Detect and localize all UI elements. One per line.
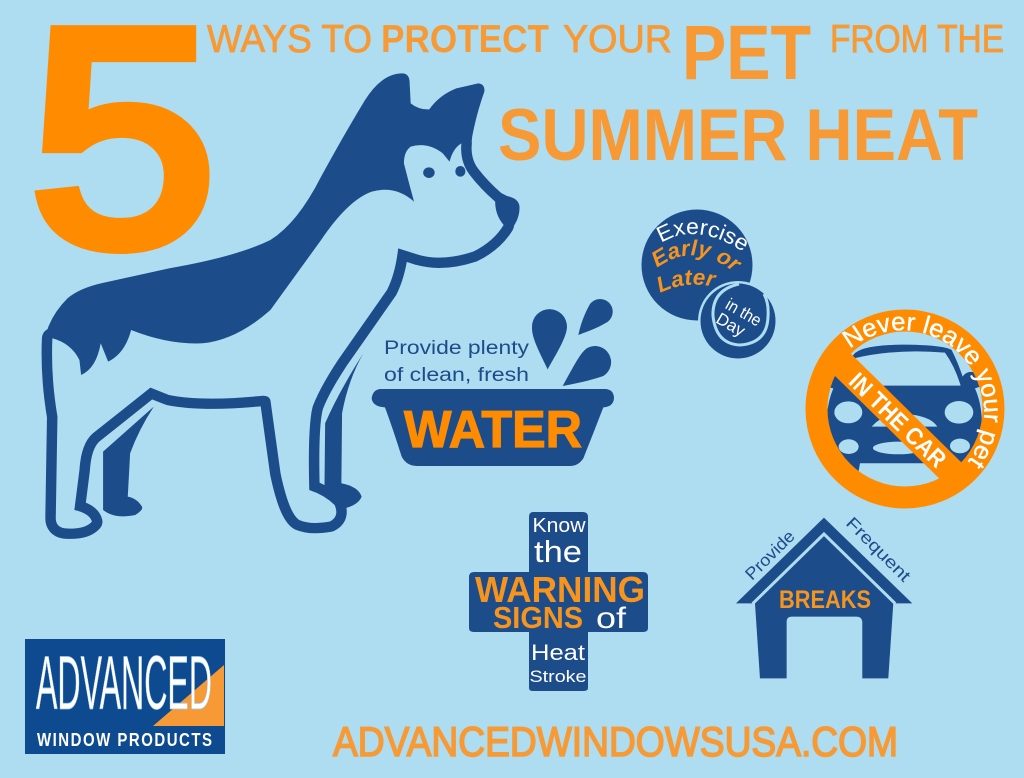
panel: water bowl: of clean, fresh xyxy=(384,365,529,386)
title xyxy=(207,10,1004,176)
logo window products text: WINDOW PRODUCTS xyxy=(37,729,212,750)
signs text: SIGNS xyxy=(493,600,583,635)
provide text: Provide xyxy=(744,532,794,580)
headlights xyxy=(834,401,862,423)
logo xyxy=(25,639,225,754)
stroke text: Stroke xyxy=(530,667,586,686)
illustration: dog xyxy=(42,73,520,529)
later text: Later xyxy=(658,270,717,293)
bowl xyxy=(372,389,614,466)
in the day text: in the xyxy=(722,295,765,330)
car xyxy=(827,345,982,473)
panel: warning signs cross xyxy=(469,512,648,691)
frequent text: Frequent xyxy=(846,517,910,582)
breaks text: BREAKS xyxy=(779,586,871,614)
know text: Know xyxy=(532,515,586,537)
text: ADVANCED xyxy=(36,641,212,726)
in the car text: IN THE CAR xyxy=(843,368,951,473)
title: PET xyxy=(682,10,811,96)
roof line xyxy=(753,534,895,604)
tennis ball xyxy=(698,281,778,361)
early or text: Early or xyxy=(652,240,742,269)
logo orange triangle xyxy=(153,665,224,726)
exercise text: Exercise xyxy=(656,222,747,250)
far hind leg xyxy=(103,407,154,516)
website url: ADVANCEDWINDOWSUSA.COM xyxy=(333,718,898,765)
warning text: WARNING xyxy=(475,569,645,610)
in the day text xyxy=(713,294,765,345)
fog lights xyxy=(839,439,859,454)
panel: dog house xyxy=(736,517,912,678)
title: SUMMER HEAT xyxy=(498,95,978,176)
water label: WATER xyxy=(404,401,582,459)
panel: never leave pet in car xyxy=(806,310,1004,508)
title: WAYS TO xyxy=(207,18,372,61)
title: YOUR xyxy=(563,18,672,61)
light body and face xyxy=(52,143,504,529)
house xyxy=(736,518,912,678)
cross shape xyxy=(469,512,648,691)
big circle xyxy=(642,210,752,320)
title: PROTECT xyxy=(381,18,549,61)
water drops xyxy=(532,299,613,386)
body outline xyxy=(52,143,504,529)
far front leg xyxy=(324,353,363,508)
panel: water bowl xyxy=(372,299,614,466)
water text: Provide plenty xyxy=(384,338,530,359)
prohibition bar xyxy=(835,357,960,480)
of text: of xyxy=(596,602,627,635)
windshield xyxy=(854,351,961,386)
grille xyxy=(872,414,937,427)
panel: exercise ball xyxy=(642,210,776,358)
head and back xyxy=(42,73,520,377)
in the day text: Day xyxy=(713,309,749,341)
prohibition ring xyxy=(816,320,994,498)
never leave your pet text: Never leave your pet xyxy=(842,315,998,469)
heat text: Heat xyxy=(531,640,585,665)
the text: the xyxy=(534,534,582,569)
eyes xyxy=(423,167,435,178)
